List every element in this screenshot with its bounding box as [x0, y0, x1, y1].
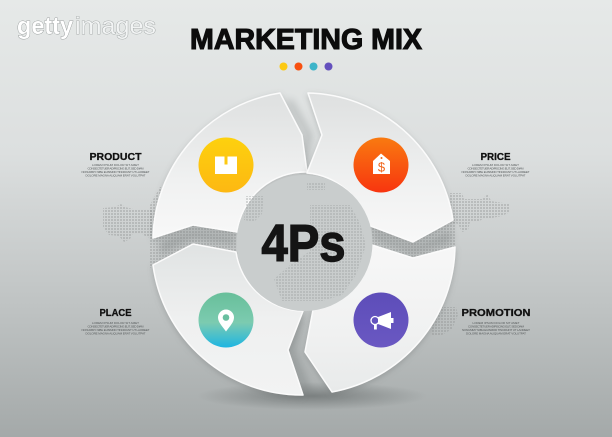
title: MARKETING MIX [190, 24, 423, 56]
icon: price tag [354, 138, 408, 192]
icon: product box [198, 138, 254, 192]
label: promotion: NONUMMY NIBH EUISMOD TINCIDUNT UT LAOREET [462, 328, 530, 332]
label: promotion: LOREM IPSUM DOLOR SIT AMET [473, 321, 520, 325]
watermark logo: images [75, 13, 156, 40]
label: product: LOREM IPSUM DOLOR SIT AMET [92, 163, 139, 167]
label: promotion: CONSECTETUER ADIPISCING ELIT, SED DIAM [468, 324, 524, 328]
label: product [82, 151, 150, 178]
label: place: PLACE [100, 307, 132, 319]
centre circle [236, 175, 372, 311]
label: place: CONSECTETUER ADIPISCING ELIT, SED DIAM [88, 324, 144, 328]
watermark logo [17, 13, 156, 40]
ring segment: price [307, 93, 453, 242]
label: price: LOREM IPSUM DOLOR SIT AMET [472, 163, 519, 167]
icon: megaphone [354, 292, 408, 348]
label: price: NONUMMY NIBH EUISMOD TINCIDUNT UT LAOREET [462, 170, 530, 174]
watermark logo: getty [17, 13, 74, 40]
label: promotion: PROMOTION [462, 307, 530, 319]
label: product: PRODUCT [90, 151, 142, 163]
label: place [82, 307, 150, 336]
label: price: DOLORE MAGNA ALIQUAM ERAT VOLUTPAT [466, 174, 526, 178]
label: price: PRICE [480, 151, 510, 163]
gap shadows between segments [160, 100, 452, 392]
floor shadow [197, 382, 427, 410]
world map dots [103, 183, 510, 335]
ring segment: promotion [305, 245, 455, 392]
label: product: CONSECTETUER ADIPISCING ELIT, SED DIAM [88, 166, 144, 170]
label: promotion [462, 307, 530, 336]
label: product: DOLORE MAGNA ALIQUAM ERAT VOLUTPAT [86, 174, 146, 178]
label: place: DOLORE MAGNA ALIQUAM ERAT VOLUTPAT [86, 332, 146, 336]
icon: price tag: $ [378, 160, 386, 174]
label: product: NONUMMY NIBH EUISMOD TINCIDUNT UT LAOREET [82, 170, 150, 174]
centre map dots [244, 183, 366, 301]
ring segment: place [153, 244, 303, 395]
icon: location pin [198, 292, 254, 348]
label: place: NONUMMY NIBH EUISMOD TINCIDUNT UT LAOREET [82, 328, 150, 332]
label: price [462, 151, 530, 178]
ring segment: product [153, 93, 307, 238]
label: place: LOREM IPSUM DOLOR SIT AMET [92, 321, 139, 325]
centre label: 4Ps [262, 215, 346, 273]
label: price: CONSECTETUER ADIPISCING ELIT, SED DIAM [468, 166, 524, 170]
label: promotion: DOLORE MAGNA ALIQUAM ERAT VOLUTPAT [466, 332, 526, 336]
colour dots [280, 62, 332, 70]
